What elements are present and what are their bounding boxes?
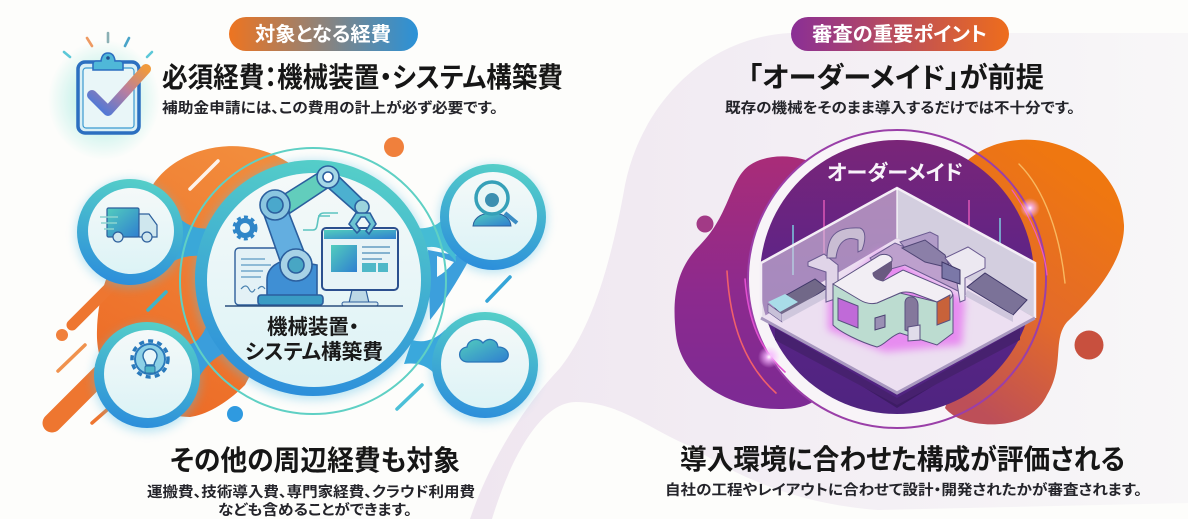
orange blob [945,140,1124,424]
squiggle [303,213,338,230]
icon: clipboard with check [48,33,160,160]
connector necks [170,196,456,385]
icon: magnifier and person [473,182,517,226]
circle: technology [94,322,200,428]
purple blob [675,156,850,409]
circle: cloud [432,312,538,418]
circle: specialist [440,164,546,270]
heading: required expense: 必須経費：機械装置・システム構築費 [162,62,563,93]
text: order-made note: 既存の機械をそのまま導入するだけでは不十分です。 [725,99,1075,117]
floor [761,238,1035,393]
text: other expenses detail [147,483,475,519]
soft circle shadows [76,160,547,432]
text: other expenses detail: なども含めることができます。 [218,501,412,519]
light streaks [793,200,1000,275]
badge: covered expenses: 対象となる経費 [255,22,391,46]
icon: truck [100,208,157,242]
heading: order-made premise: 「オーダーメイド」が前提 [748,61,1044,93]
gear icon [234,217,256,239]
hub label: 機械装置・ [267,316,359,339]
badge: covered expenses [229,17,418,51]
icon: gear and bulb [132,341,168,377]
right box and conveyor [942,247,1027,322]
label: order-made: オーダーメイド [827,161,963,185]
floor line [225,305,403,307]
orange blob [97,146,292,417]
badge: key review points [791,17,1009,51]
left back wall [761,188,897,318]
text: evaluation note: 自社の工程やレイアウトに合わせて設計・開発されたかが審査されます。 [665,481,1142,499]
white halo [748,130,1046,428]
dots [696,216,1104,360]
right graphic: order-made factory [675,130,1124,428]
left conveyor [768,228,865,322]
accent dots and strokes [56,137,510,422]
right back wall [897,188,1035,318]
isometric room [761,188,1035,408]
main circle [195,160,431,396]
badge: key review points: 審査の重要ポイント [812,23,987,46]
base [780,335,1016,408]
orange streaks [52,285,112,423]
hub label [245,316,383,364]
left document panel [235,248,281,305]
thin purple ring [748,130,1046,428]
sparkles [758,198,1040,368]
text: other expenses detail: 運搬費、技術導入費、専門家経費、クラウド利用費 [147,483,475,501]
background pale lavender shape [470,33,1188,519]
wall rim [761,188,1035,318]
back conveyor [870,243,965,292]
computer monitor [322,228,398,306]
robot arm [258,166,376,305]
heading: other expenses: その他の周辺経費も対象 [170,445,460,476]
icon: cloud [460,340,508,362]
heading: evaluation: 導入環境に合わせた構成が評価される [680,443,1125,475]
blue swoosh between circles [428,250,470,320]
floor glow [828,250,965,352]
left graphic: machinery and peripheral expenses hub [52,137,547,432]
circle: truck [77,179,183,285]
thin outer ring [180,148,446,414]
hub label: システム構築費 [245,341,383,364]
purple circle [760,140,1034,414]
text: required expense note: 補助金申請には、この費用の計上が必ず必要です。 [162,99,498,117]
central machine [833,254,953,347]
decorative arcs [727,164,1065,393]
